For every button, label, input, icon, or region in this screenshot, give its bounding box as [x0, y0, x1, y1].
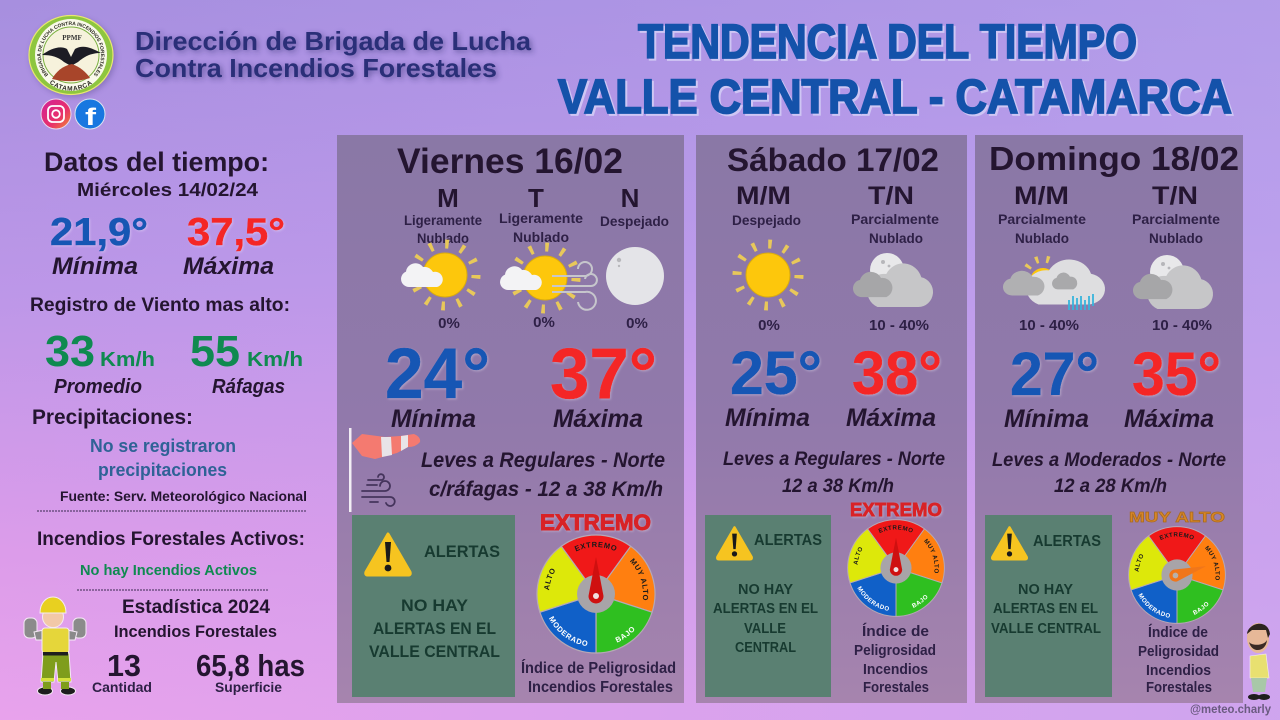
gauge caption: Incendios	[863, 661, 928, 678]
gauge: extremo	[536, 534, 656, 654]
gauge caption	[1138, 624, 1219, 696]
sky conditions text	[732, 211, 939, 246]
temperatures	[1004, 340, 1221, 433]
temperatures: 24°	[385, 335, 490, 414]
alert box: NO HAY	[401, 596, 469, 615]
alert box: ALERTAS	[424, 542, 500, 561]
sky conditions text: Ligeramente	[499, 210, 583, 226]
heading: organisation name: Dirección de Brigada de Lucha	[137, 28, 534, 58]
title	[558, 16, 1234, 126]
panel: datos del tiempo: 21,9°	[50, 211, 148, 254]
sky conditions text: Parcialmente	[851, 211, 939, 227]
fire danger label: EXTREMO	[850, 500, 942, 520]
precipitation probabilities	[438, 314, 648, 332]
alert box: VALLE CENTRAL	[369, 642, 500, 661]
precipitation probabilities	[758, 317, 929, 334]
panel: datos del tiempo: Máxima	[183, 253, 274, 280]
icon: firefighter	[24, 597, 86, 695]
sky conditions text: Nublado	[417, 230, 469, 246]
fire danger label: EXTREMO	[540, 510, 651, 535]
icon: sun with cloud and wind	[500, 247, 597, 310]
alert box: ALERTAS EN EL	[993, 601, 1098, 617]
icon: forecaster avatar	[1247, 623, 1270, 700]
panel: precipitaciones: Fuente: Serv. Meteorológico Nacional	[60, 488, 307, 504]
panel: incendios activos: Incendios Forestales Activos:	[37, 529, 305, 550]
icon: moon with clouds	[1133, 255, 1213, 309]
temperatures: 25°	[730, 339, 822, 407]
wind forecast: Leves a Moderados - Norte	[992, 450, 1226, 471]
gauge: extremo: EXTREMO	[574, 542, 616, 552]
gauge caption: Forestales	[863, 679, 929, 696]
heading: organisation name: Dirección de Brigada de Lucha	[135, 26, 532, 56]
period labels: M T N	[437, 183, 639, 213]
panel: datos del tiempo	[44, 147, 285, 280]
logo: brigada badge: CATAMARCA	[50, 80, 92, 91]
panel: incendios activos: No hay Incendios Activos	[80, 563, 257, 579]
panel: datos del tiempo: 37,5°	[187, 211, 285, 254]
logo: brigada badge: BRIGADA DE LUCHA CONTRA INCENDIOS FORESTALES	[37, 22, 104, 77]
panel: incendios activos	[37, 529, 305, 579]
gauge: extremo: MODERADO	[858, 586, 889, 610]
gauge: muy alto: EXTREMO	[1159, 532, 1194, 540]
precipitation probabilities	[1019, 317, 1212, 334]
alert box: VALLE CENTRAL	[991, 621, 1101, 637]
gauge: extremo: BAJO	[912, 595, 928, 608]
precipitation probabilities: 0%	[758, 317, 780, 334]
panel: precipitaciones: Precipitaciones:	[32, 406, 193, 429]
precipitation probabilities: 0%	[533, 314, 555, 331]
icon: facebook	[75, 99, 105, 131]
heading: organisation name	[135, 26, 534, 85]
temperatures: Mínima	[391, 405, 476, 433]
panel: estadistica 2024: 65,8 has	[196, 648, 305, 683]
temperatures: Mínima	[1004, 405, 1089, 433]
gauge: muy alto	[1128, 526, 1226, 624]
alert box: ALERTAS EN EL	[713, 601, 818, 617]
sky conditions text	[404, 210, 669, 246]
temperatures	[725, 339, 942, 432]
period labels: T/N	[868, 182, 914, 210]
wind forecast: Leves a Regulares - Norte	[723, 449, 945, 470]
panel: domingo 18/02	[975, 135, 1243, 703]
panel: estadistica 2024: 13	[107, 648, 141, 683]
wind forecast	[421, 449, 665, 501]
alert box: NO HAY	[1018, 582, 1073, 598]
gauge: muy alto: BAJO	[1192, 602, 1208, 615]
heading: viernes: Viernes 16/02	[397, 142, 623, 181]
panel: estadistica 2024: Incendios Forestales	[114, 622, 277, 641]
title: TENDENCIA DEL TIEMPO	[638, 16, 1137, 69]
icon: wind	[362, 474, 395, 506]
sky conditions text: Ligeramente	[404, 212, 482, 228]
temperatures: 27°	[1010, 340, 1099, 408]
panel: datos del tiempo: Miércoles 14/02/24	[77, 180, 258, 200]
alert box	[985, 515, 1112, 697]
icon: full moon	[606, 247, 664, 305]
sky conditions text: Despejado	[600, 213, 669, 229]
period labels	[736, 182, 914, 210]
heading: organisation name: Contra Incendios Forestales	[135, 53, 497, 83]
alert box	[705, 515, 831, 697]
panel: registro de viento: Km/h	[100, 349, 155, 371]
gauge: extremo: MUY ALTO	[630, 558, 648, 600]
period labels: M T N: N	[621, 183, 639, 213]
panel: registro de viento: Ráfagas	[212, 376, 285, 398]
sky conditions text: Despejado	[732, 212, 801, 228]
logo: brigada badge: PPMF	[62, 34, 82, 42]
panel: datos del tiempo: Mínima	[52, 253, 138, 280]
alert box: ALERTAS EN EL	[373, 619, 496, 638]
gauge: extremo: ALTO	[854, 547, 862, 565]
sky conditions text	[998, 211, 1220, 246]
wind forecast	[992, 450, 1226, 497]
gauge: extremo: MODERADO	[549, 616, 588, 646]
alert box: ALERTAS	[754, 532, 822, 549]
panel: precipitaciones	[32, 406, 307, 504]
wind forecast: c/ráfagas - 12 a 38 Km/h	[429, 478, 663, 501]
temperatures	[385, 335, 657, 433]
panel: estadistica 2024: Estadística 2024	[122, 597, 270, 618]
panel: estadistica 2024	[92, 597, 305, 695]
icon: sun, clouds and rain	[1003, 259, 1105, 310]
gauge caption: Índice de	[862, 623, 929, 640]
panel: registro de viento: Promedio	[54, 376, 142, 398]
wind forecast: 12 a 28 Km/h	[1054, 476, 1167, 497]
panel: precipitaciones: No se registraron	[90, 436, 236, 456]
heading: domingo: Domingo 18/02	[989, 140, 1239, 177]
temperatures: Máxima	[846, 404, 936, 432]
precipitation probabilities: 0%	[626, 315, 648, 332]
panel: estadistica 2024: Cantidad	[92, 679, 152, 695]
sky conditions text: Nublado	[869, 230, 923, 246]
alert box: NO HAY	[738, 582, 793, 598]
temperatures: Máxima	[553, 405, 643, 433]
temperatures: Mínima	[725, 404, 810, 432]
panel: registro de viento	[30, 295, 303, 398]
credit: @meteo.charly	[1190, 702, 1271, 716]
wind forecast: Leves a Regulares - Norte	[421, 449, 665, 472]
icon: windsock	[349, 428, 420, 512]
alert box: CENTRAL	[735, 640, 796, 656]
period labels: M/M	[736, 182, 791, 210]
icon: sun	[737, 244, 799, 306]
gauge caption	[854, 623, 936, 696]
gauge caption: Incendios	[1146, 662, 1211, 679]
sky conditions text: Parcialmente	[1132, 211, 1220, 227]
precipitation probabilities: 0%	[438, 315, 460, 332]
fire danger label: MUY ALTO	[1129, 509, 1225, 526]
temperatures: 38°	[852, 339, 942, 407]
heading: sabado: Sábado 17/02	[727, 142, 939, 178]
gauge: extremo	[847, 519, 945, 617]
panel: sabado 17/02	[696, 135, 967, 703]
panel: datos del tiempo: Datos del tiempo:	[44, 147, 269, 177]
gauge: muy alto: MUY ALTO	[1204, 546, 1220, 580]
gauge caption: Incendios Forestales	[528, 679, 673, 696]
title: VALLE CENTRAL - CATAMARCA	[558, 71, 1232, 124]
period labels: M T N: T	[528, 183, 544, 213]
temperatures: 35°	[1132, 340, 1221, 408]
panel: registro de viento: Km/h	[247, 349, 303, 371]
panel: registro de viento: 55	[190, 327, 240, 376]
sky conditions text: Nublado	[513, 229, 569, 245]
title: TENDENCIA DEL TIEMPO	[640, 18, 1139, 71]
sky conditions text: Nublado	[1149, 230, 1203, 246]
period labels	[1014, 182, 1198, 210]
panel: registro de viento: Registro de Viento mas alto:	[30, 295, 290, 316]
gauge: muy alto: ALTO	[1134, 554, 1144, 572]
gauge: extremo: ALTO	[544, 568, 555, 590]
gauge caption	[521, 658, 676, 696]
icon: facebook: f	[85, 104, 97, 131]
gauge: muy alto: MODERADO	[1138, 593, 1170, 618]
alert box	[352, 515, 515, 697]
wind forecast: 12 a 38 Km/h	[782, 476, 894, 497]
temperatures: 37°	[550, 335, 657, 414]
panel: precipitaciones: precipitaciones	[98, 460, 227, 480]
icon: sun with cloud	[401, 244, 476, 306]
gauge caption: Peligrosidad	[1138, 643, 1219, 660]
heading: organisation name: Contra Incendios Forestales	[137, 55, 499, 85]
gauge: extremo: BAJO	[615, 627, 634, 642]
period labels: M/M	[1014, 182, 1069, 210]
gauge caption: Peligrosidad	[854, 642, 936, 659]
gauge caption: Forestales	[1146, 679, 1212, 696]
panel: estadistica 2024: Superficie	[215, 679, 282, 695]
period labels: T/N	[1152, 182, 1198, 210]
gauge: extremo: EXTREMO	[878, 525, 913, 533]
gauge caption: Índice de Peligrosidad	[521, 658, 676, 677]
period labels: M T N: M	[437, 183, 459, 213]
precipitation probabilities: 10 - 40%	[1152, 317, 1212, 334]
logo: brigada badge	[28, 14, 118, 99]
icon: moon with clouds	[853, 253, 933, 307]
alert box: VALLE	[744, 621, 786, 637]
gauge caption: Índice de	[1148, 624, 1208, 641]
temperatures: Máxima	[1124, 405, 1214, 433]
precipitation probabilities: 10 - 40%	[869, 317, 929, 334]
sky conditions text: Parcialmente	[998, 211, 1086, 227]
panel: registro de viento: 33	[45, 327, 95, 376]
precipitation probabilities: 10 - 40%	[1019, 317, 1079, 334]
sky conditions text: Nublado	[1015, 230, 1069, 246]
wind forecast	[723, 449, 945, 497]
gauge: extremo: MUY ALTO	[924, 538, 939, 573]
panel: viernes 16/02	[337, 135, 684, 703]
icon: instagram	[41, 99, 71, 129]
alert box: ALERTAS	[1033, 533, 1101, 550]
